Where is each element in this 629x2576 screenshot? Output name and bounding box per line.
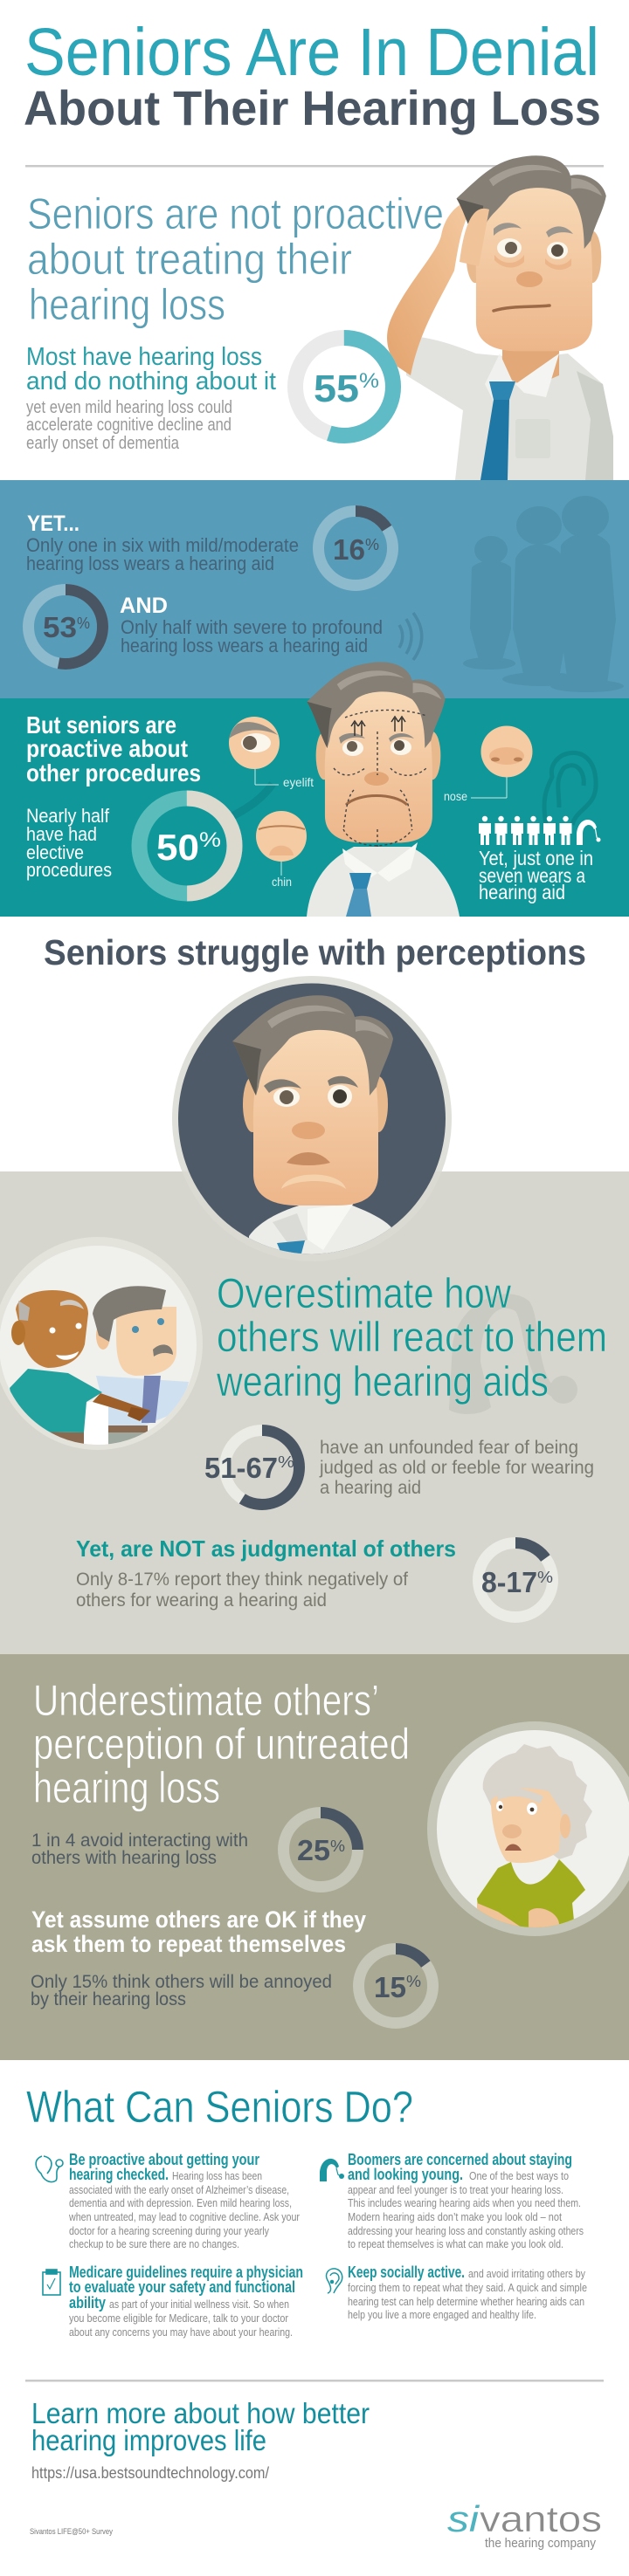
callout: learn more bbox=[31, 2397, 370, 2482]
subheading: most have hearing loss: and do nothing about it bbox=[26, 368, 276, 395]
heading: overestimate: wearing hearing aids bbox=[216, 1359, 549, 1405]
heading: underestimate: hearing loss bbox=[33, 1763, 220, 1812]
donut: 16%: 16 bbox=[333, 533, 365, 566]
subheading: yet assume bbox=[31, 1906, 366, 1957]
text: be proactive: checkup to be sure there are no changes. bbox=[69, 2237, 239, 2250]
illustration: man holding head bbox=[387, 155, 613, 480]
subheading: yet assume: ask them to repeat themselves bbox=[31, 1931, 346, 1957]
text: only 8-17%: Only 8-17% report they think negatively of bbox=[76, 1570, 408, 1590]
text: medicare bbox=[69, 2263, 303, 2339]
text: only 15% bbox=[31, 1972, 332, 2009]
text: boomers: and looking young. bbox=[348, 2166, 463, 2183]
text: be proactive: when untreated, may lead to cognitive decline. Ask your bbox=[68, 2210, 301, 2223]
text: 1 in 4: others with hearing loss bbox=[31, 1848, 217, 1868]
donut: 50% bbox=[140, 798, 234, 894]
logo: sivantos bbox=[447, 2498, 602, 2551]
icon: chin circle: chin bbox=[272, 875, 292, 889]
heading: underestimate bbox=[33, 1676, 410, 1812]
text: nearly half: Nearly half bbox=[26, 805, 110, 827]
panel: not proactive bbox=[26, 155, 613, 480]
text: and: AND bbox=[120, 594, 168, 618]
text: only 15%: by their hearing loss bbox=[31, 1989, 186, 2009]
subheading: yet assume: Yet assume others are OK if they bbox=[31, 1906, 366, 1933]
text: medicare: to evaluate your safety and functional bbox=[69, 2278, 295, 2296]
text: and bbox=[120, 594, 383, 656]
donut: 51-67%: 51-67 bbox=[204, 1452, 278, 1484]
donut: 55% bbox=[295, 338, 393, 436]
text: be proactive: Hearing loss has been bbox=[172, 2169, 262, 2182]
logo: sivantos: si bbox=[447, 2498, 480, 2539]
heading: seniors are not proactive: about treating their bbox=[27, 235, 352, 284]
text: 1 in 4 bbox=[31, 1831, 248, 1868]
text: unfounded fear: a hearing aid bbox=[320, 1478, 421, 1498]
title: About Their Hearing Loss bbox=[24, 80, 601, 135]
donut: 16%: % bbox=[365, 536, 379, 553]
text: cognitive decline bbox=[26, 398, 232, 453]
panel: underestimate (olive) bbox=[0, 1654, 629, 2060]
donut: 55%: % bbox=[359, 369, 379, 393]
heading: seniors are not proactive: hearing loss bbox=[29, 280, 225, 329]
text: medicare: as part of your initial wellness visit. So when bbox=[109, 2298, 289, 2311]
heading: what can seniors do: What Can Seniors Do? bbox=[26, 2082, 413, 2132]
heading: overestimate: Overestimate how bbox=[217, 1271, 511, 1317]
text: boomers: Boomers are concerned about staying bbox=[348, 2151, 572, 2168]
donut: 8-17%: 8-17 bbox=[481, 1566, 537, 1598]
icon: nose circle bbox=[444, 726, 533, 803]
icon: chin circle bbox=[256, 811, 307, 889]
source note: Sivantos LIFE@50+ Survey bbox=[30, 2527, 113, 2537]
subheading: most have hearing loss: Most have hearing loss bbox=[26, 343, 262, 371]
heading: seniors struggle: Seniors struggle with perceptions bbox=[44, 932, 586, 972]
portrait: woman bbox=[427, 1721, 629, 1936]
icon: eye circle bbox=[229, 717, 314, 789]
text: keep socially active: help you live a more engaged and healthy life. bbox=[348, 2308, 536, 2321]
text: only 8-17% bbox=[76, 1570, 408, 1611]
text: boomers: to repeat themselves is what can make you look old. bbox=[348, 2237, 563, 2250]
donut: 25% bbox=[283, 1812, 358, 1887]
panel: yet (blue) bbox=[0, 480, 629, 698]
text: boomers: This includes wearing hearing aids when you need them. bbox=[348, 2196, 581, 2209]
text: medicare: about any concerns you may have about your hearing. bbox=[69, 2325, 293, 2339]
icon: hearing aid bbox=[320, 2159, 344, 2181]
text: keep socially active: forcing them to repeat what they said. A quick and simple bbox=[348, 2281, 587, 2294]
text: yet: hearing loss wears a hearing aid bbox=[26, 553, 274, 574]
title bbox=[24, 15, 601, 135]
text: cognitive decline: early onset of dementia bbox=[26, 434, 180, 453]
text: keep socially active: and avoid irritating others by bbox=[468, 2267, 585, 2280]
callout: learn more: Learn more about how better bbox=[31, 2397, 370, 2429]
donut: 25%: % bbox=[330, 1838, 345, 1855]
text: unfounded fear: have an unfounded fear of being bbox=[320, 1438, 578, 1458]
icon: eye circle: eyelift bbox=[283, 775, 314, 789]
heading: but seniors are proactive: other procedures bbox=[26, 759, 201, 787]
text: yet: YET... bbox=[27, 512, 79, 536]
text: be proactive: associated with the early onset of Alzheimer’s disease, bbox=[69, 2183, 289, 2196]
illustration: man with surgery marks bbox=[307, 662, 460, 917]
text: cognitive decline: accelerate cognitive decline and bbox=[26, 416, 232, 435]
icon: hearing aid watermark bbox=[449, 1294, 577, 1414]
text: and: hearing loss wears a hearing aid bbox=[121, 635, 368, 656]
heading: but seniors are proactive: But seniors are bbox=[26, 711, 176, 738]
donut: 53% bbox=[28, 590, 103, 663]
logo: sivantos: the hearing company bbox=[485, 2536, 596, 2551]
text: unfounded fear bbox=[319, 1438, 594, 1498]
text: cognitive decline: yet even mild hearing loss could bbox=[26, 398, 232, 417]
text: be proactive: Be proactive about getting your bbox=[69, 2151, 259, 2168]
heading: seniors are not proactive bbox=[27, 189, 444, 329]
text: nearly half bbox=[26, 805, 112, 881]
text: one in seven: hearing aid bbox=[479, 881, 565, 903]
text: medicare: Medicare guidelines require a physician bbox=[69, 2263, 303, 2281]
text: nearly half: have had bbox=[26, 823, 97, 845]
icon: stethoscope bbox=[36, 2156, 63, 2182]
subheading: not as judgmental: Yet, are NOT as judgmental of others bbox=[76, 1535, 456, 1562]
text: one in seven bbox=[479, 847, 593, 903]
text: one in seven: Yet, just one in bbox=[479, 847, 593, 869]
icon: one in seven people bbox=[479, 816, 601, 845]
callout: learn more: https://usa.bestsoundtechnology.com/ bbox=[31, 2464, 269, 2482]
donut: 16% bbox=[318, 512, 393, 585]
icon: clipboard bbox=[43, 2270, 60, 2295]
text: medicare: you become eligible for Medicare, talk to your doctor bbox=[69, 2312, 289, 2325]
text: nearly half: procedures bbox=[26, 859, 112, 881]
text: nearly half: elective bbox=[26, 841, 84, 863]
text: and: Only half with severe to profound bbox=[121, 616, 383, 638]
icon: nose circle: nose bbox=[444, 789, 467, 803]
text: medicare: ability bbox=[69, 2294, 106, 2312]
text: only 8-17%: others for wearing a hearing aid bbox=[76, 1590, 327, 1611]
donut: 15%: % bbox=[406, 1973, 421, 1990]
heading: overestimate bbox=[216, 1271, 607, 1405]
donut: 50%: 50 bbox=[156, 827, 199, 868]
panel: what can seniors do bbox=[26, 2082, 587, 2339]
text: be proactive: hearing checked. bbox=[69, 2166, 169, 2183]
callout: learn more: hearing improves life bbox=[31, 2424, 266, 2456]
text: be proactive: dementia and with depression. Even mild hearing loss, bbox=[69, 2196, 292, 2209]
donut: 50%: % bbox=[199, 828, 221, 852]
donut: 8-17%: % bbox=[537, 1569, 553, 1586]
portrait: frowning man bbox=[172, 976, 452, 1261]
portrait: two men bbox=[0, 1237, 203, 1450]
text: 1 in 4: 1 in 4 avoid interacting with bbox=[31, 1831, 248, 1851]
text: be proactive bbox=[68, 2151, 301, 2250]
heading: seniors are not proactive: Seniors are not proactive bbox=[27, 189, 444, 238]
icon: hearing aid watermark bbox=[232, 784, 273, 816]
text: unfounded fear: judged as old or feeble for wearing bbox=[319, 1458, 594, 1478]
donut: 25%: 25 bbox=[297, 1834, 330, 1866]
text: yet: Only one in six with mild/moderate bbox=[26, 534, 299, 556]
heading: but seniors are proactive bbox=[26, 711, 201, 787]
text: be proactive: doctor for a hearing screening during your yearly bbox=[69, 2224, 269, 2237]
donut: 53%: 53 bbox=[43, 611, 77, 643]
text: keep socially active: Keep socially active. bbox=[348, 2263, 465, 2281]
donut: 15% bbox=[358, 1948, 433, 2023]
heading: underestimate: Underestimate others’ bbox=[33, 1676, 379, 1725]
donut: 51-67% bbox=[204, 1430, 299, 1505]
donut: 8-17% bbox=[479, 1543, 553, 1617]
donut: 55%: 55 bbox=[314, 368, 359, 410]
donut: 15%: 15 bbox=[374, 1971, 406, 2003]
text: boomers: appear and feel younger is to treat your hearing loss. bbox=[348, 2183, 563, 2196]
panel: proactive about procedures (teal) bbox=[0, 662, 629, 917]
text: one in seven: seven wears a bbox=[479, 864, 585, 887]
silhouettes bbox=[463, 496, 624, 692]
text: boomers: Modern hearing aids don’t make you look old – not bbox=[348, 2210, 562, 2223]
text: boomers bbox=[348, 2151, 584, 2250]
subheading: most have hearing loss bbox=[26, 343, 276, 395]
icon: ear watermark bbox=[544, 752, 596, 825]
text: keep socially active bbox=[348, 2263, 587, 2321]
donut: 51-67%: % bbox=[278, 1453, 294, 1471]
icon: sound waves bbox=[399, 613, 422, 660]
text: boomers: One of the best ways to bbox=[469, 2169, 569, 2182]
heading: but seniors are proactive: proactive about bbox=[26, 735, 188, 762]
text: keep socially active: hearing test can help determine whether hearing aids can bbox=[348, 2295, 584, 2308]
donut: 53%: % bbox=[77, 615, 90, 632]
logo: sivantos: vantos bbox=[480, 2498, 602, 2539]
text: only 15%: Only 15% think others will be annoyed bbox=[31, 1972, 332, 1992]
heading: underestimate: perception of untreated bbox=[33, 1720, 410, 1769]
panel: overestimate (grey) bbox=[0, 976, 629, 1654]
text: yet bbox=[26, 512, 299, 574]
icon: ear bbox=[327, 2269, 342, 2293]
